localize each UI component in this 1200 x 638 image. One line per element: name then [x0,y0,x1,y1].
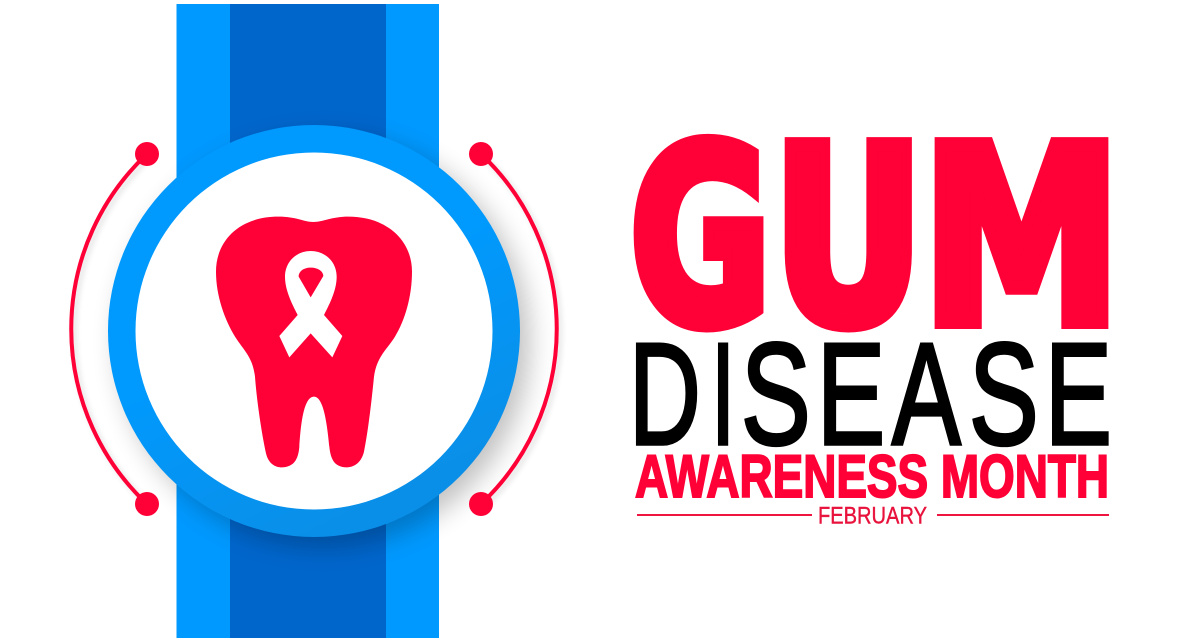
blue circle ring [108,125,520,537]
heading word: GUM: G [630,96,771,380]
white circle [136,152,492,510]
heading word: DISEASE: D [629,313,701,475]
heading word: DISEASE: E [1045,313,1111,475]
circle drop shadow [118,135,530,547]
heading word: DISEASE: I [711,313,735,475]
right rule [937,514,1109,516]
heading word: DISEASE: A [892,313,960,475]
icon: tooth with awareness ribbon [216,217,412,467]
heading word: DISEASE: S [969,313,1039,475]
blue vertical band [176,4,439,638]
heading word: DISEASE: S [741,313,811,475]
heading word: GUM: M [922,96,1121,380]
heading word: DISEASE: E [816,313,885,475]
heading word: GUM: U [773,96,924,380]
left rule [637,514,812,516]
month label: FEBRUARY: FEBRUARY [818,502,927,530]
curved connector arcs with dots [71,142,560,516]
